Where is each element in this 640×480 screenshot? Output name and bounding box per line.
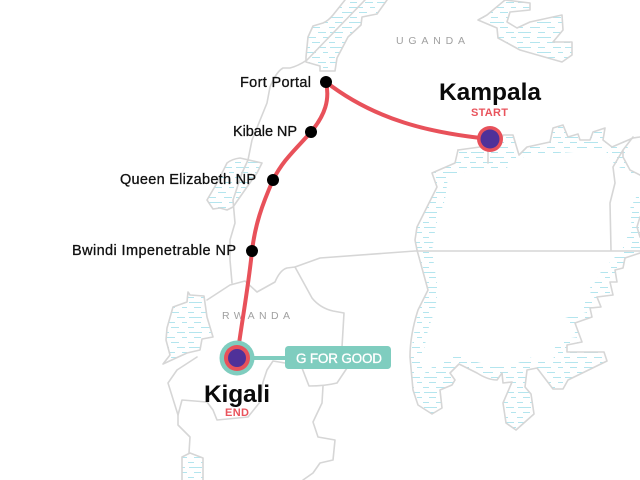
- badge: G for Good: G FOR GOOD: [296, 351, 382, 366]
- start marker: Kampala: [477, 126, 503, 152]
- lake: Kivu: [163, 292, 213, 364]
- stop: Bwindi Impenetrable NP: Bwindi Impenetrable NP: [72, 243, 236, 259]
- lake: Bottom: [182, 453, 203, 480]
- label: Rwanda: RWANDA: [222, 310, 290, 322]
- label: Uganda: UGANDA: [396, 35, 465, 47]
- end marker: Kigali: [220, 340, 254, 376]
- stop: Kibale NP: Kibale NP: [233, 124, 297, 140]
- tag: start: START: [471, 107, 508, 119]
- lake: Albert: [306, 0, 387, 71]
- badge: G for Good: [285, 346, 391, 369]
- connector: Kigali to G for Good: [245, 356, 287, 360]
- lake: Victoria: [410, 125, 640, 430]
- city label: Kampala: Kampala: [439, 79, 541, 106]
- stop: Fort Portal: Fort Portal: [240, 75, 311, 91]
- city label: Kigali: Kigali: [204, 381, 270, 408]
- stop: Queen Elizabeth NP: Queen Elizabeth NP: [120, 172, 256, 188]
- lake: Kyoga: [478, 0, 572, 62]
- tag: end: END: [225, 407, 249, 419]
- lake: Edward: [207, 158, 262, 210]
- country borders: [168, 0, 640, 480]
- route line: [237, 82, 490, 358]
